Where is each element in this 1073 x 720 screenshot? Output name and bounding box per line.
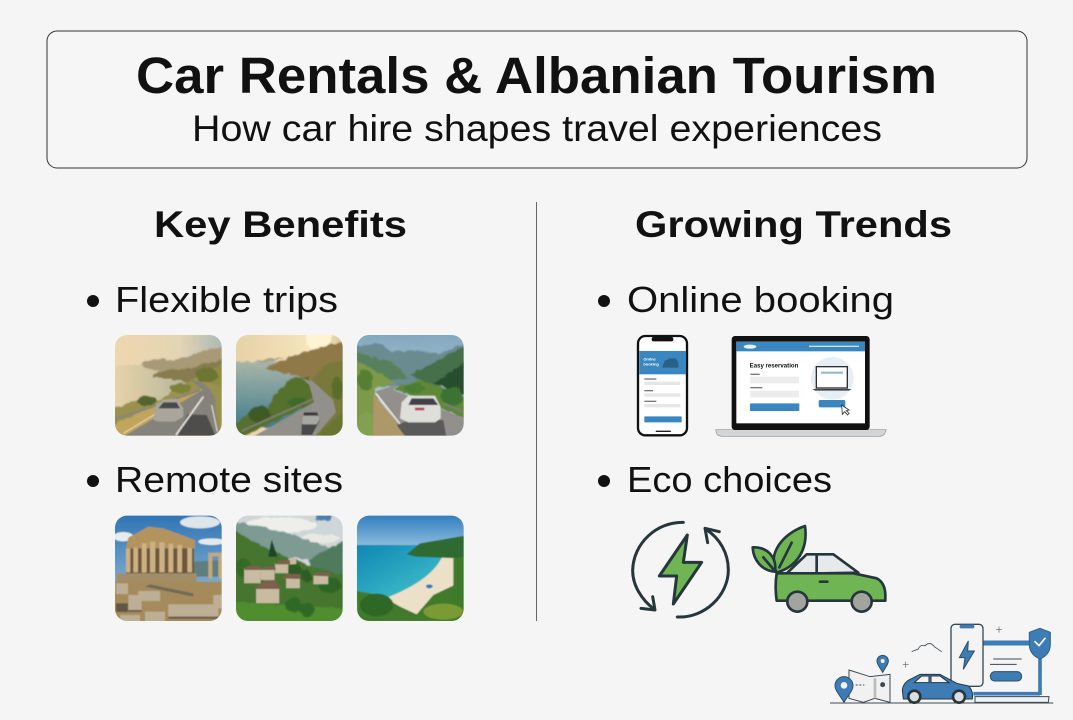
photo: hillside stone village xyxy=(236,516,343,621)
photo: ancient temple ruins xyxy=(113,514,225,623)
icon: small pin centre xyxy=(881,659,885,663)
icon: smartphone booking screen xyxy=(638,336,687,435)
icon: laptop outline xyxy=(973,643,1049,702)
icon: blue car xyxy=(902,674,972,703)
icon: green car with leaves xyxy=(753,526,885,612)
ground line xyxy=(830,701,1053,704)
illustration: footer travel and technology scene xyxy=(830,624,1053,703)
photo: mountain valley road with white SUV xyxy=(357,335,464,436)
photo: turquoise beach bay xyxy=(355,514,467,622)
icon: security shield xyxy=(1029,628,1050,659)
photo: coastal road with car at sunset xyxy=(115,335,222,436)
title: Car Rentals & Albanian Tourism xyxy=(136,47,937,104)
title panel xyxy=(47,31,1027,168)
bullet: remote sites: Remote sites xyxy=(115,459,343,500)
icon: pin centre xyxy=(841,682,847,689)
bullet: online booking: Online booking xyxy=(627,279,894,320)
photo: coast with sun over mountain xyxy=(236,335,343,436)
icon: phone with lightning bolt xyxy=(951,624,983,686)
icon: smartphone booking screen: booking xyxy=(643,362,659,367)
bullet: eco choices: Eco choices xyxy=(627,459,832,500)
bullet: flexible trips: Flexible trips xyxy=(115,279,338,320)
icon: renewable energy bolt in cycle arrows xyxy=(633,522,728,617)
cloud outline xyxy=(912,644,942,652)
illustration: eco icons xyxy=(633,522,885,617)
icon: small map pin xyxy=(877,655,888,672)
icon: laptop booking screen xyxy=(716,336,886,436)
photo row: coastal road drives xyxy=(115,335,464,436)
subtitle: How car hire shapes travel experiences xyxy=(192,108,882,149)
photo row: remote sites xyxy=(113,511,467,624)
heading: key benefits: Key Benefits xyxy=(154,204,407,245)
icon: folded map xyxy=(849,670,890,702)
column divider xyxy=(536,202,538,621)
icon: large map pin xyxy=(835,677,853,702)
illustration: online booking devices xyxy=(638,336,886,436)
icon: laptop booking screen: Easy reservation xyxy=(750,363,798,370)
heading: growing trends: Growing Trends xyxy=(635,204,952,245)
sparkle xyxy=(903,627,1002,668)
icon: smartphone booking screen: Online xyxy=(643,357,657,362)
